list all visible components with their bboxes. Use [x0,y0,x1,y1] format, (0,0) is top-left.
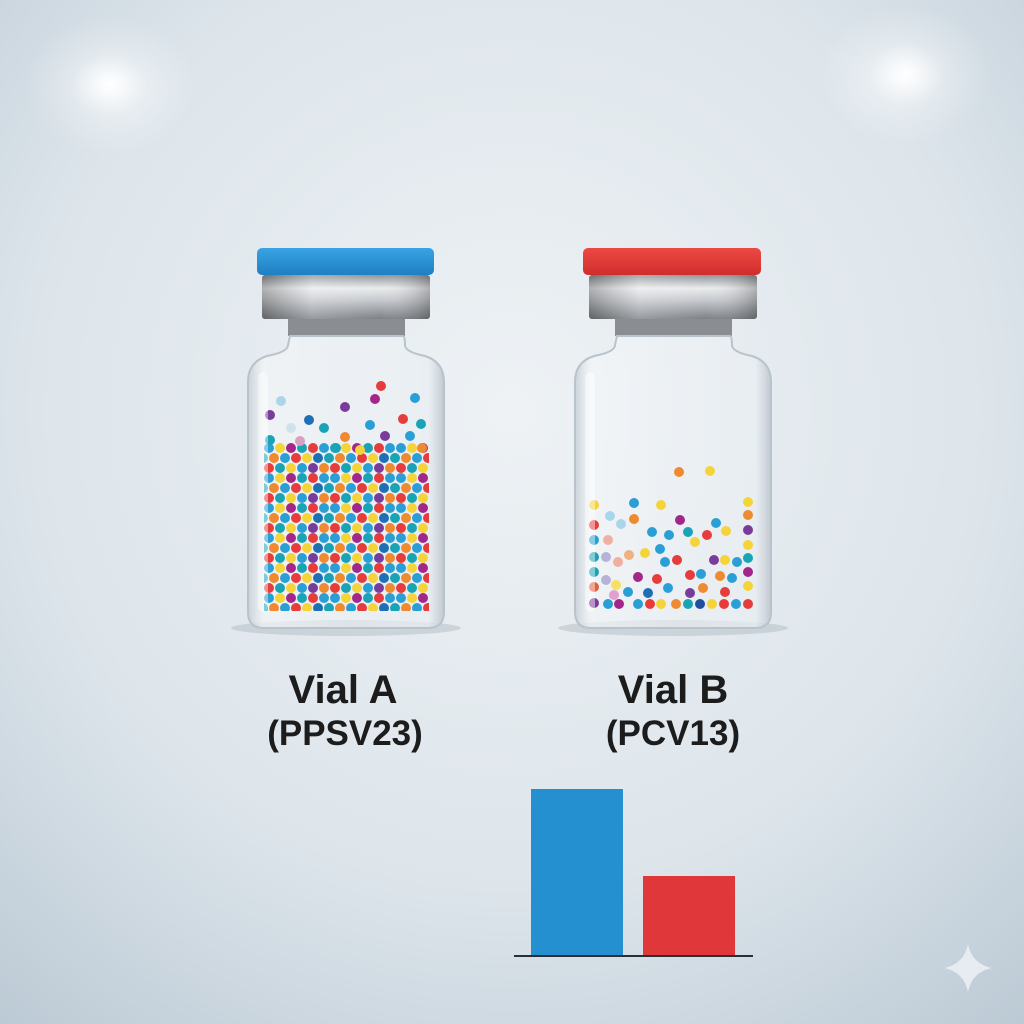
stopper neck [615,319,732,336]
metal crimp band [262,275,430,319]
label: vial B: (PCV13) [606,714,740,753]
icon: sparkle [944,944,992,992]
glass highlight [585,372,595,612]
stopper neck [288,319,405,336]
metal crimp band [589,275,757,319]
vial B [558,248,788,636]
dense particles [264,381,429,611]
label: vial A: Vial A [289,668,397,712]
glass highlight [258,372,268,612]
glass body [575,336,771,628]
cap: blue [257,248,434,275]
spotlight right [820,5,990,145]
bar: vial A [531,789,623,956]
cap: red [583,248,761,275]
sparse particles [589,466,753,609]
label: vial B: Vial B [618,668,728,712]
bar chart [514,789,753,957]
bar: vial B [643,876,735,956]
label: vial B [606,668,740,753]
axis [514,955,753,957]
spotlight left [25,15,195,155]
label: vial A [267,668,423,753]
label: vial A: (PPSV23) [267,714,423,753]
glass body [248,336,444,628]
vial A [231,248,461,636]
